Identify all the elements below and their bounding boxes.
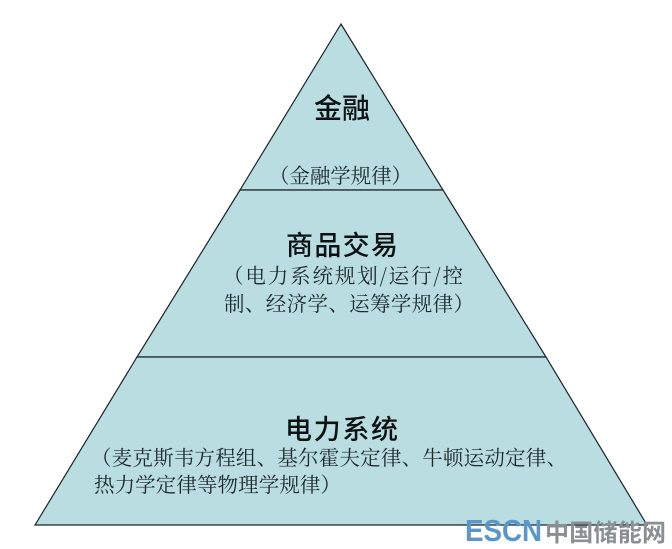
text block: 电力系统规划 xyxy=(223,259,474,317)
heading: 电力系统: 电力系统 xyxy=(285,408,398,447)
watermark: ESCN 中国储能网 xyxy=(465,513,666,548)
pyramid tier: 金融 xyxy=(240,24,443,190)
text block: 电力系统规划: （电力系统规划/运行/控 xyxy=(223,259,463,289)
heading: 商品交易: 商品交易 xyxy=(286,224,398,263)
text block: 麦克斯韦方程组 xyxy=(91,441,567,498)
heading: 金融: 金融 xyxy=(314,87,370,127)
pyramid tier: 电力系统 xyxy=(35,357,647,525)
text: 金融学规律: （金融学规律） xyxy=(269,159,412,189)
watermark: ESCN 中国储能网: ESCN xyxy=(465,513,542,548)
text block: 麦克斯韦方程组: 热力学定律等物理学规律） xyxy=(94,468,341,498)
watermark: ESCN 中国储能网: 中国储能网 xyxy=(545,513,666,548)
text block: 麦克斯韦方程组: （麦克斯韦方程组、基尔霍夫定律、牛顿运动定律、 xyxy=(91,441,567,471)
text block: 电力系统规划: 制、经济学、运筹学规律） xyxy=(224,287,474,317)
pyramid tier: 商品交易 xyxy=(137,190,546,357)
